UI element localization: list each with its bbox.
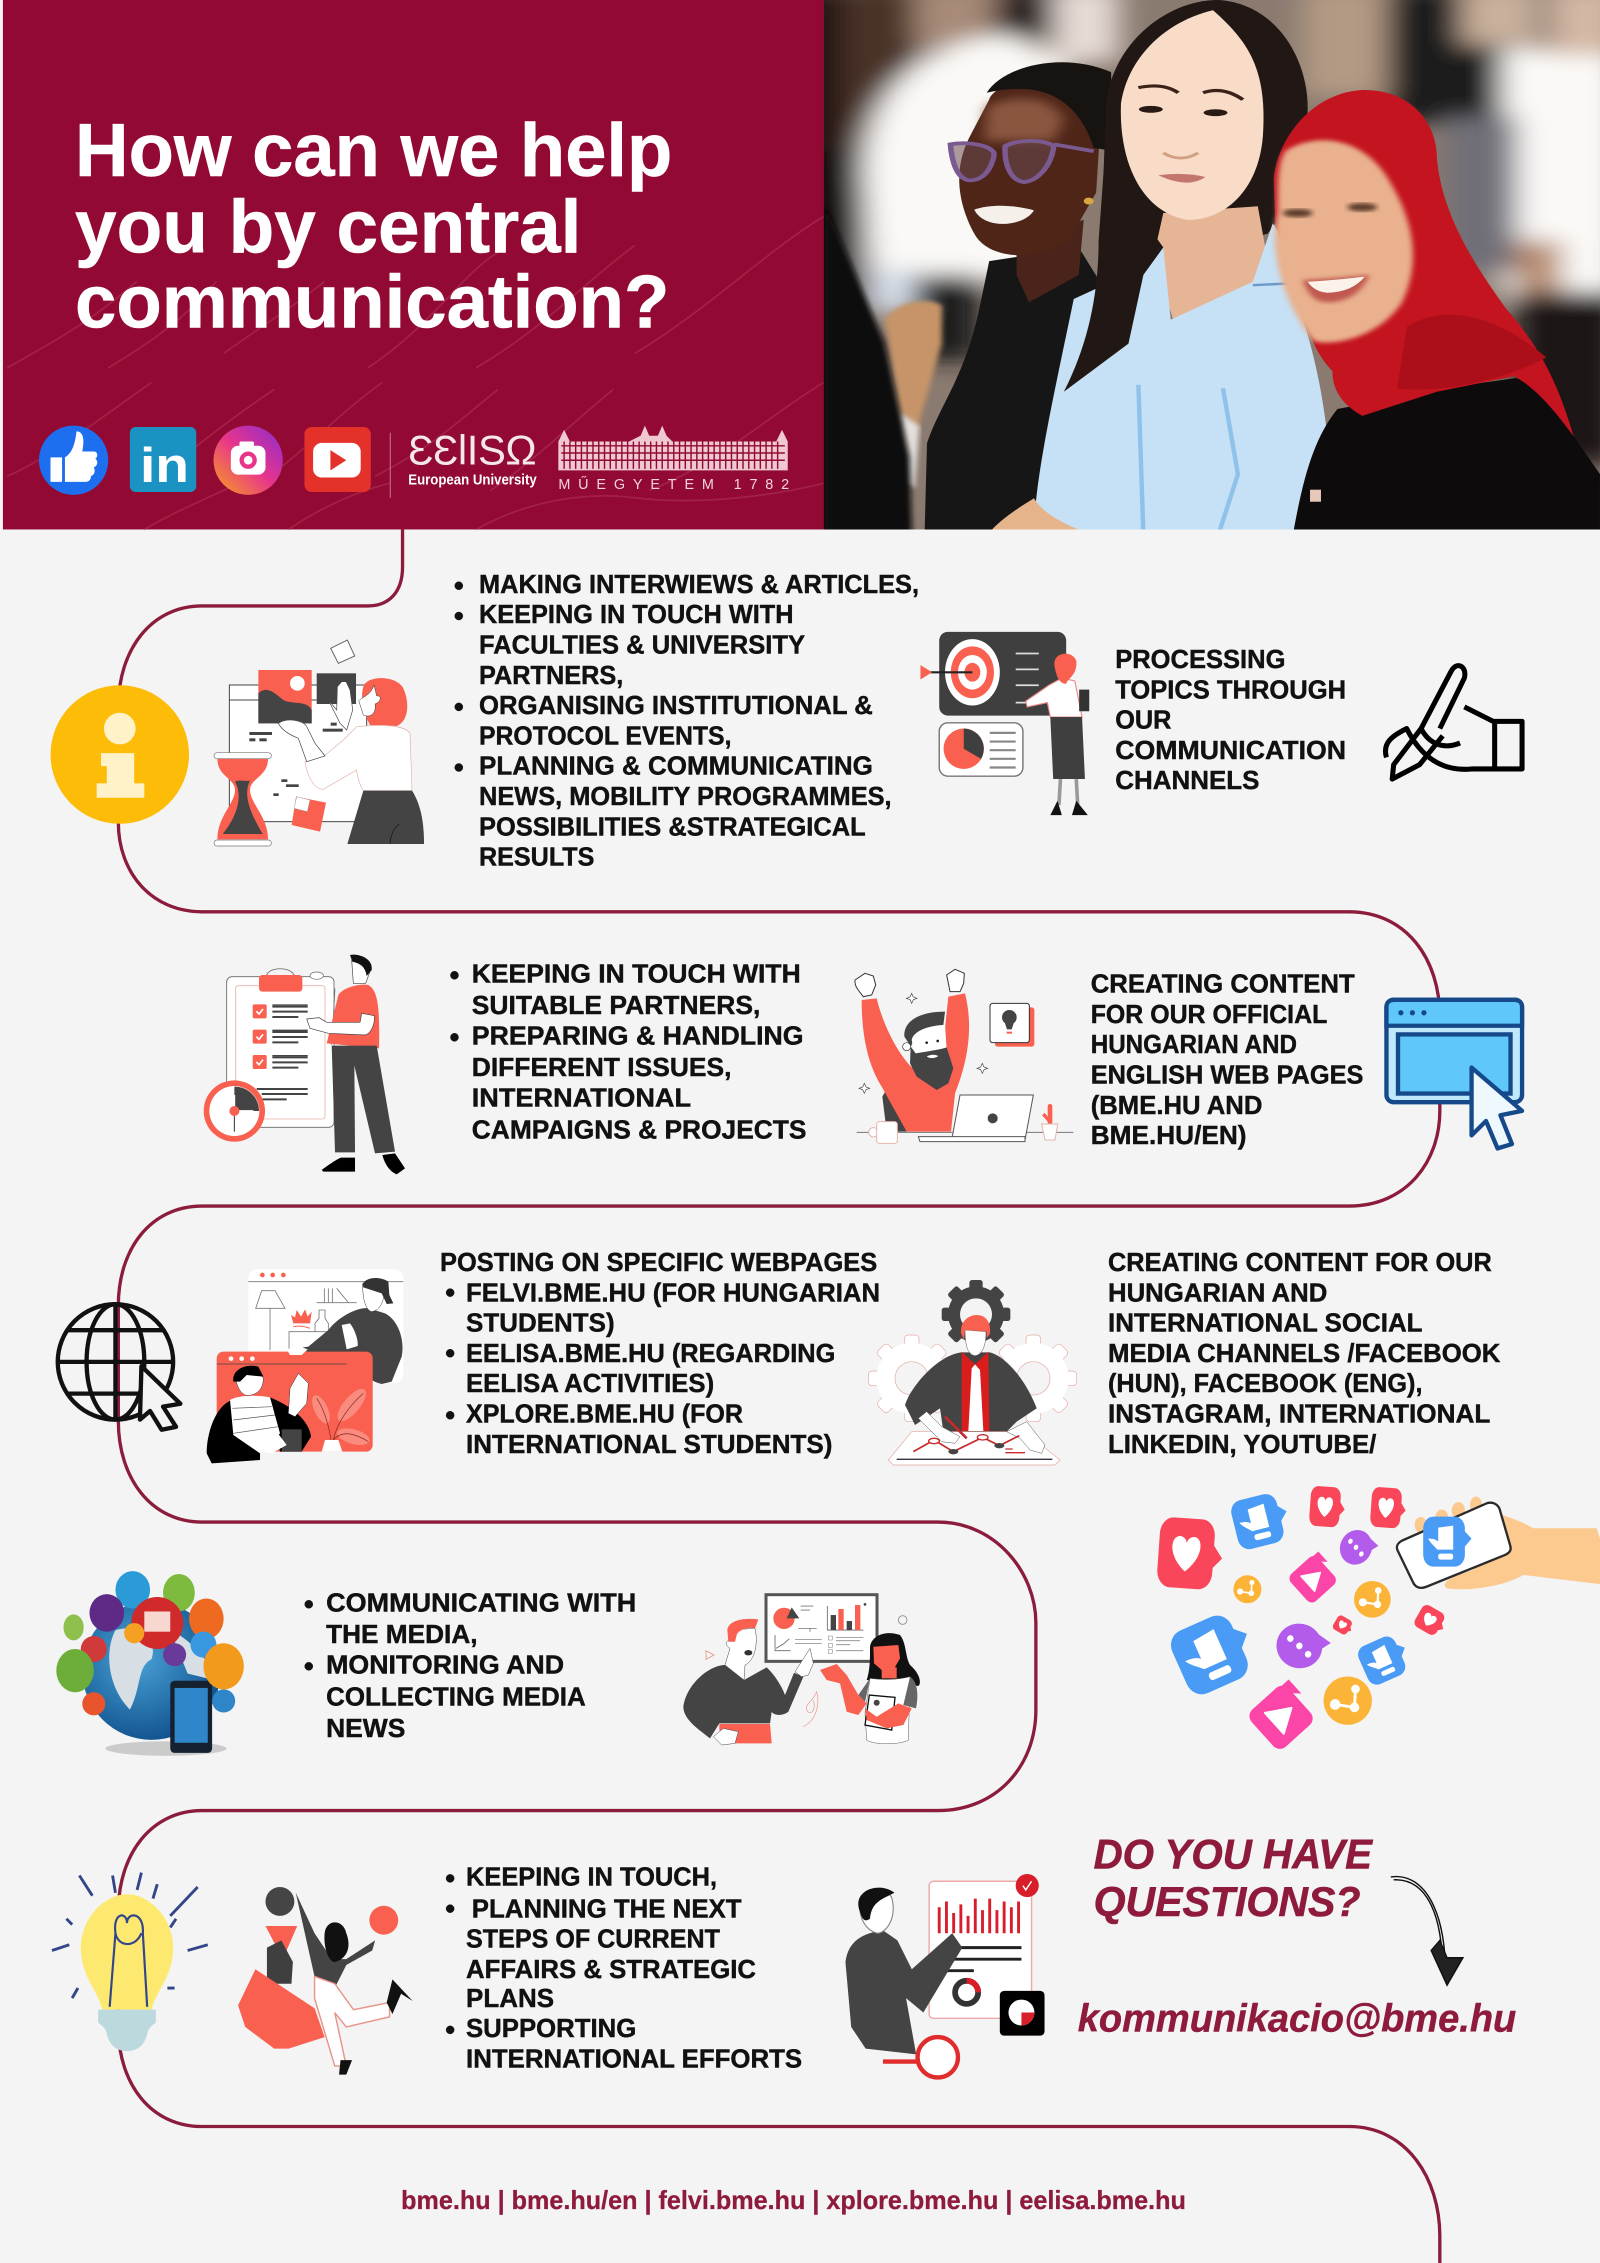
text: keeping in touch list: AFFAIRS & STRATEGIC xyxy=(466,1954,756,1984)
text: posting on specific webpages: EELISA ACTIVITIES) xyxy=(466,1368,714,1398)
illustration: man with report and magnifier xyxy=(845,1874,1045,2077)
text: social media content: (HUN), FACEBOOK (ENG), xyxy=(1108,1368,1423,1398)
text: responsibilities list 1: FACULTIES & UNIVERSITY xyxy=(479,630,805,660)
text: keeping in touch list: STEPS OF CURRENT xyxy=(466,1924,720,1954)
illustration: hand holding phone with floating social reactions xyxy=(1156,1486,1600,1753)
callout: do you have questions: QUESTIONS? xyxy=(1094,1878,1360,1926)
callout: do you have questions: DO YOU HAVE xyxy=(1094,1830,1373,1877)
text: responsibilities list 2: DIFFERENT ISSUES, xyxy=(472,1052,731,1082)
icon: Instagram xyxy=(214,426,283,495)
text: web content xyxy=(1091,969,1363,1150)
text: responsibilities list 1: KEEPING IN TOUCH WITH xyxy=(479,599,794,629)
social media icons xyxy=(39,426,371,495)
text: posting on specific webpages: POSTING ON SPECIFIC WEBPAGES xyxy=(440,1247,877,1277)
illustration: bearded man with laptop xyxy=(855,969,1073,1143)
illustration: dancing woman with shapes xyxy=(238,1887,413,2075)
illustration: woman presenting target board xyxy=(920,632,1089,815)
icon: globe with cursor xyxy=(58,1304,180,1430)
icon: hand writing with pen xyxy=(1385,666,1522,779)
title xyxy=(75,108,672,343)
text: media communication list: THE MEDIA, xyxy=(326,1619,478,1649)
text: social media content xyxy=(1108,1247,1501,1459)
illustration: man with gears and chart xyxy=(868,1280,1077,1465)
text: social media content: HUNGARIAN AND xyxy=(1108,1277,1327,1307)
middle woman xyxy=(989,0,1332,536)
logo: EELISA European University: ƐƐlISΩ xyxy=(408,427,537,474)
text: web content: (BME.HU AND xyxy=(1091,1090,1262,1120)
text: responsibilities list 2: INTERNATIONAL xyxy=(472,1083,691,1113)
arrow: hand-drawn pointing to email xyxy=(1391,1877,1463,1985)
right woman xyxy=(1274,90,1600,536)
icon: information circle xyxy=(51,685,189,824)
left woman xyxy=(925,62,1114,536)
text: responsibilities list 1: MAKING INTERWIEWS & ARTICLES, xyxy=(479,569,919,599)
text: social media content: INTERNATIONAL SOCIAL xyxy=(1108,1308,1423,1338)
footer links: bme.hu | bme.hu/en | felvi.bme.hu | xplore.bme.hu | eelisa.bme.hu xyxy=(401,2185,1186,2215)
text: responsibilities list 2: CAMPAIGNS & PROJECTS xyxy=(472,1114,806,1144)
chair xyxy=(885,301,942,430)
title: communication? xyxy=(75,259,669,343)
text: processing topics: COMMUNICATION xyxy=(1115,735,1346,765)
header panel: maroon title block xyxy=(3,0,825,529)
icon: YouTube xyxy=(304,427,371,492)
text: posting on specific webpages: XPLORE.BME.HU (FOR xyxy=(466,1398,743,1428)
text: responsibilities list 1: PARTNERS, xyxy=(479,660,623,690)
curved connector line xyxy=(118,529,1440,2263)
illustration: globe with media app icons xyxy=(56,1571,244,1756)
text: processing topics: PROCESSING xyxy=(1115,644,1285,674)
text: media communication list: COMMUNICATING WITH xyxy=(326,1587,636,1617)
text: web content: HUNGARIAN AND xyxy=(1091,1029,1297,1059)
text: responsibilities list 2: KEEPING IN TOUCH WITH xyxy=(472,958,801,988)
illustration: people using web pages xyxy=(207,1269,403,1463)
text: posting on specific webpages: FELVI.BME.HU (FOR HUNGARIAN xyxy=(466,1277,880,1307)
callout: do you have questions xyxy=(1094,1830,1373,1926)
icon: LinkedIn xyxy=(130,427,196,493)
text: web content: CREATING CONTENT xyxy=(1091,969,1355,999)
text: processing topics: CHANNELS xyxy=(1115,765,1259,795)
icon: browser window with cursor xyxy=(1386,1000,1522,1148)
text: web content: BME.HU/EN) xyxy=(1091,1120,1247,1150)
text: responsibilities list 1 xyxy=(455,569,919,872)
text: web content: ENGLISH WEB PAGES xyxy=(1091,1059,1363,1089)
text: responsibilities list 1: ORGANISING INSTITUTIONAL & xyxy=(479,690,873,720)
icon: Facebook like xyxy=(39,426,108,495)
text: media communication list: NEWS xyxy=(326,1713,405,1743)
logo: EELISA European University: European University xyxy=(408,473,537,489)
text: web content: FOR OUR OFFICIAL xyxy=(1091,999,1327,1029)
text: processing topics: TOPICS THROUGH xyxy=(1115,674,1346,704)
text: responsibilities list 1: PLANNING & COMMUNICATING xyxy=(479,751,873,781)
text: responsibilities list 2 xyxy=(450,958,806,1144)
blurred crowd background xyxy=(800,0,1600,550)
logo: Műegyetem 1782: MŰEGYETEM 1782 xyxy=(558,476,789,493)
text: keeping in touch list: INTERNATIONAL EFFORTS xyxy=(466,2043,802,2073)
title: How can we help xyxy=(75,108,672,192)
text: media communication list: COLLECTING MEDIA xyxy=(326,1681,586,1711)
text: responsibilities list 1: RESULTS xyxy=(479,842,594,872)
text: keeping in touch list: PLANNING THE NEXT xyxy=(472,1893,742,1923)
illustration: man with clipboard and clock xyxy=(204,955,405,1174)
text: posting on specific webpages: STUDENTS) xyxy=(466,1308,615,1338)
title: you by central xyxy=(75,184,581,268)
illustration: two people at chart board xyxy=(683,1595,920,1745)
text: social media content: CREATING CONTENT FOR OUR xyxy=(1108,1247,1492,1277)
text: responsibilities list 1: PROTOCOL EVENTS, xyxy=(479,720,731,750)
text: posting on specific webpages: INTERNATIONAL STUDENTS) xyxy=(466,1429,832,1459)
photo: three smiling students xyxy=(800,0,1600,550)
text: keeping in touch list: KEEPING IN TOUCH, xyxy=(466,1862,717,1892)
text: keeping in touch list: PLANS xyxy=(466,1983,554,2013)
text: media communication list xyxy=(305,1587,636,1743)
text: responsibilities list 1: NEWS, MOBILITY PROGRAMMES, xyxy=(479,781,892,811)
text: social media content: LINKEDIN, YOUTUBE/ xyxy=(1108,1429,1376,1459)
icon: light bulb xyxy=(52,1873,208,2051)
text: media communication list: MONITORING AND xyxy=(326,1650,564,1680)
text: responsibilities list 1: POSSIBILITIES &STRATEGICAL xyxy=(479,811,866,841)
text: posting on specific webpages: EELISA.BME.HU (REGARDING xyxy=(466,1338,835,1368)
icon: LinkedIn: in xyxy=(140,439,189,493)
text: keeping in touch list xyxy=(446,1862,802,2073)
text: keeping in touch list: SUPPORTING xyxy=(466,2013,636,2043)
text: responsibilities list 2: SUITABLE PARTNERS, xyxy=(472,990,760,1020)
text: social media content: MEDIA CHANNELS /FACEBOOK xyxy=(1108,1338,1501,1368)
logo: Műegyetem 1782 xyxy=(558,426,789,493)
text: posting on specific webpages xyxy=(440,1247,880,1459)
text: processing topics: OUR xyxy=(1115,705,1172,735)
logo: EELISA European University xyxy=(390,427,537,498)
contact email: kommunikacio@bme.hu xyxy=(1078,1997,1516,2040)
illustration: woman arranging pictures with hourglass xyxy=(214,640,424,846)
text: responsibilities list 2: PREPARING & HANDLING xyxy=(472,1021,804,1051)
text: processing topics xyxy=(1115,644,1346,795)
text: social media content: INSTAGRAM, INTERNATIONAL xyxy=(1108,1398,1490,1428)
